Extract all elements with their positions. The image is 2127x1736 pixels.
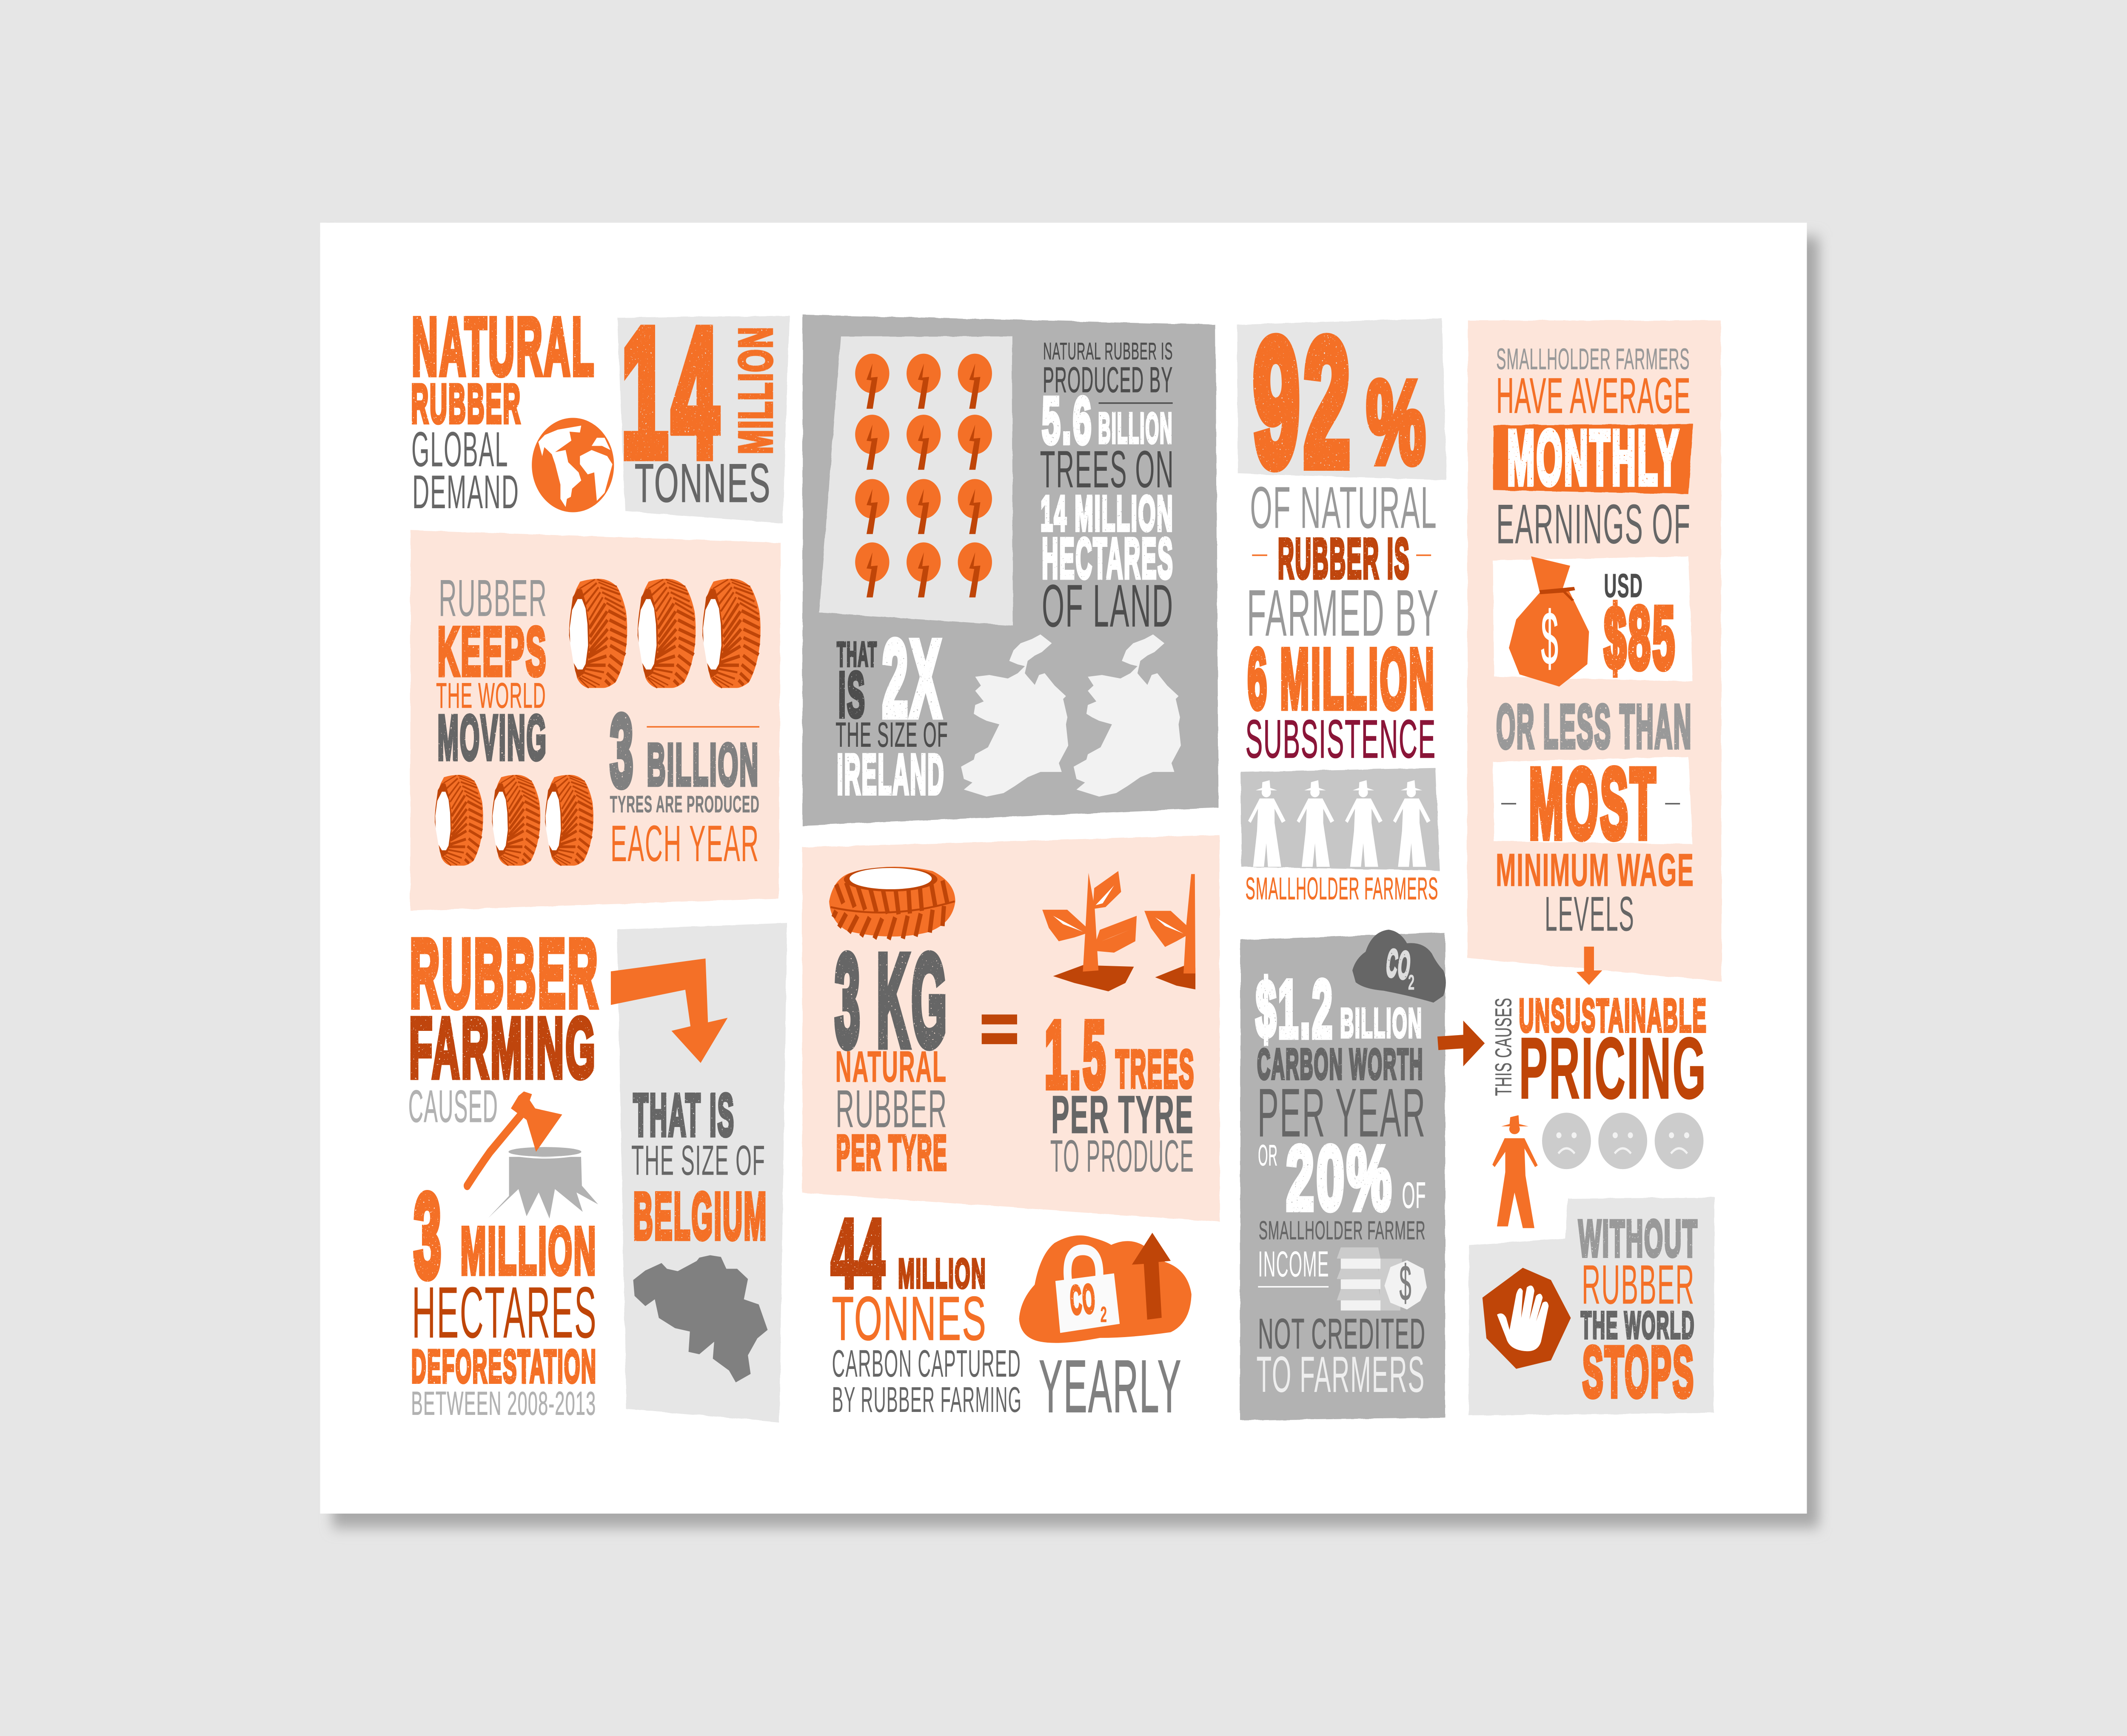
panel: 14 million tonnes [617,292,790,523]
panel: monthly earnings: MONTHLY [1507,415,1680,501]
text: usd: USD [1604,566,1643,604]
text: million vertical: MILLION [730,326,782,454]
text: tonnes: TONNES [832,1284,987,1353]
symbol: equals [982,1014,1017,1044]
text: the world: THE WORLD [1581,1304,1695,1346]
text: the size of: THE SIZE OF [631,1137,765,1184]
text: RUBBER [410,920,599,1027]
text: this causes vertical: THIS CAUSES [1491,998,1516,1096]
panel: monthly earnings: OR LESS THAN [1496,692,1692,761]
text: smallholder farmer: SMALLHOLDER FARMER [1259,1216,1426,1245]
panel: 5.6 billion trees [802,315,1218,825]
text: rubber: RUBBER [439,570,547,627]
text: trees on: TREES ON [1040,440,1175,499]
icon: axe and stump [467,1091,598,1218]
poster card [320,223,1807,1514]
text: income: INCOME [1258,1244,1329,1284]
panel: rubber keeps the world moving: 3 [610,694,635,808]
text: stops: STOPS [1582,1332,1695,1412]
panel: rubber farming deforestation [408,920,599,1422]
panel: monthly earnings [1467,320,1722,982]
icon: co2 cloud with lock: CO [1069,1275,1097,1323]
text: deforestation: DEFORESTATION [411,1340,597,1392]
number: $1.2: $1.2 [1256,964,1334,1055]
map: belgium [633,1255,767,1383]
arrow: orange bent arrow [611,959,727,1063]
text: produced by: PRODUCED BY [1043,360,1173,400]
text: tyres are produced: TYRES ARE PRODUCED [610,791,760,818]
text: caused: CAUSED [408,1081,498,1132]
number: 44: 44 [831,1200,887,1307]
panel: farmed by smallholders: RUBBER IS [1278,527,1410,590]
icon: co2 cloud with lock [1019,1233,1192,1343]
panel: 3kg equals 1.5 trees: TREES [1115,1039,1195,1099]
panel: carbon worth: CARBON WORTH [1257,1040,1423,1089]
panel: 5.6 billion trees: IS [838,659,866,730]
panel: 5.6 billion trees: HECTARES [1042,526,1174,590]
icon: money bag: $ [1541,597,1559,680]
text: have average: HAVE AVERAGE [1496,368,1691,424]
panel: size of belgium: BELGIUM [633,1179,768,1253]
text: subsistence: SUBSISTENCE [1246,709,1436,770]
icon: co2 dark cloud: CO [1384,941,1413,988]
panel: size of belgium: THAT IS [633,1081,735,1148]
icon: grid of trees [855,354,992,598]
text: 14 million: 14 MILLION [1041,486,1174,541]
panel: farmed by smallholders [1240,474,1440,906]
text: billion: BILLION [647,731,759,798]
text: by rubber farming: BY RUBBER FARMING [832,1379,1022,1420]
panel: 3kg equals 1.5 trees [802,835,1220,1222]
icon: co2 dark cloud: 2 [1408,970,1415,994]
panel: without rubber the world stops [1468,1198,1715,1416]
heading: farming: FARMING [409,1000,597,1096]
panel: 44 million tonnes carbon [831,1200,1192,1428]
panel: 5.6 billion trees: THAT [837,635,878,674]
panel: unsustainable pricing [1491,990,1707,1228]
text: million: MILLION [460,1214,597,1289]
panel: 5.6 billion trees: 2X [882,618,943,740]
text: not credited: NOT CREDITED [1258,1310,1426,1357]
icon: co2 cloud with lock: 2 [1101,1302,1107,1327]
text: per tyre: PER TYRE [1051,1085,1194,1144]
text: between 2008-2013: BETWEEN 2008-2013 [411,1385,596,1422]
heading: rubber: RUBBER [411,373,522,435]
icon: sad faces [1542,1113,1703,1169]
text: billion: BILLION [1340,1000,1423,1046]
text: per year: PER YEAR [1257,1075,1426,1152]
icon: money bag [1509,556,1589,686]
text: natural: NATURAL [835,1042,947,1091]
text: each year: EACH YEAR [610,815,759,872]
number: 92: 92 [1253,302,1354,504]
heading: natural rubber: NATURAL [412,301,596,392]
text: keeps: KEEPS [437,613,547,690]
text: without: WITHOUT [1578,1210,1698,1268]
text: earnings of: EARNINGS OF [1496,493,1691,555]
text: yearly: YEARLY [1039,1345,1182,1428]
panel: rubber farming deforestation: 3 [414,1170,443,1302]
text: levels: LEVELS [1545,887,1634,941]
text: smallholder farmers: SMALLHOLDER FARMERS [1246,871,1438,906]
text: farmed by: FARMED BY [1247,576,1440,650]
text: million: MILLION [898,1250,987,1297]
icon: orange farmer [1492,1115,1538,1228]
text: of: OF [1402,1175,1426,1216]
panel: carbon worth: OR [1258,1138,1278,1172]
text: global: GLOBAL [411,422,508,477]
text: minimum wage: MINIMUM WAGE [1496,845,1694,896]
icon: co2 dark cloud [1352,930,1446,1002]
text: rubber: RUBBER [1582,1253,1695,1315]
symbol: percent: % [1366,357,1428,488]
number: 1.5: 1.5 [1044,1002,1108,1108]
arrow: levels to pricing [1577,947,1602,985]
text: to farmers: TO FARMERS [1256,1346,1425,1403]
icon: tyres top row [569,579,761,688]
text: of natural: OF NATURAL [1250,474,1437,541]
number: 14: 14 [621,292,722,494]
panel: size of belgium [611,923,787,1422]
text: pricing: PRICING [1519,1019,1707,1117]
text: tonnes: TONNES [635,453,771,514]
text: rubber: RUBBER [835,1079,947,1138]
icon: stop hand [1483,1268,1571,1369]
panel: carbon worth [1240,930,1446,1420]
icon: tyres bottom row [435,775,593,865]
icon: globe [532,418,614,512]
panel: 92 percent [1237,302,1447,504]
icon: coins stack: $ [1400,1255,1412,1311]
panel: four farmers [1240,768,1440,871]
panel: 5.6 billion trees: IRELAND [837,743,945,806]
text: natural rubber is: NATURAL RUBBER IS [1043,338,1173,365]
text: to produce: TO PRODUCE [1050,1131,1194,1182]
number: $85: $85 [1604,589,1677,687]
map: two irelands [961,635,1181,797]
icon: plants [1042,871,1195,991]
text: the world: THE WORLD [436,675,546,715]
icon: flat tyre [829,867,955,939]
text: carbon captured: CARBON CAPTURED [832,1342,1021,1385]
text: smallholder farmers: SMALLHOLDER FARMERS [1496,342,1690,376]
number: 5.6: 5.6 [1042,383,1093,457]
panel: natural rubber global demand [411,301,614,518]
text: the size of: THE SIZE OF [835,716,948,754]
text: 6 MILLION [1247,631,1436,726]
text: demand: DEMAND [412,465,519,518]
panel: rubber keeps the world moving [410,530,781,911]
number: 20%: 20% [1286,1128,1394,1229]
panel: monthly earnings: MOST [1529,748,1657,859]
icon: coins stack [1337,1247,1427,1311]
panel: 3kg equals 1.5 trees: PER TYRE [836,1125,948,1180]
panel: 5.6 billion trees: BILLION [1098,404,1173,452]
panel: 3kg equals 1.5 trees: 3 KG [835,927,949,1073]
text: of land: OF LAND [1042,572,1174,640]
panel: rubber keeps the world moving: MOVING [437,703,547,773]
text: unsustainable: UNSUSTAINABLE [1519,990,1707,1042]
text: hectares: HECTARES [412,1272,597,1353]
arrow: carbon to pricing [1437,1021,1485,1066]
